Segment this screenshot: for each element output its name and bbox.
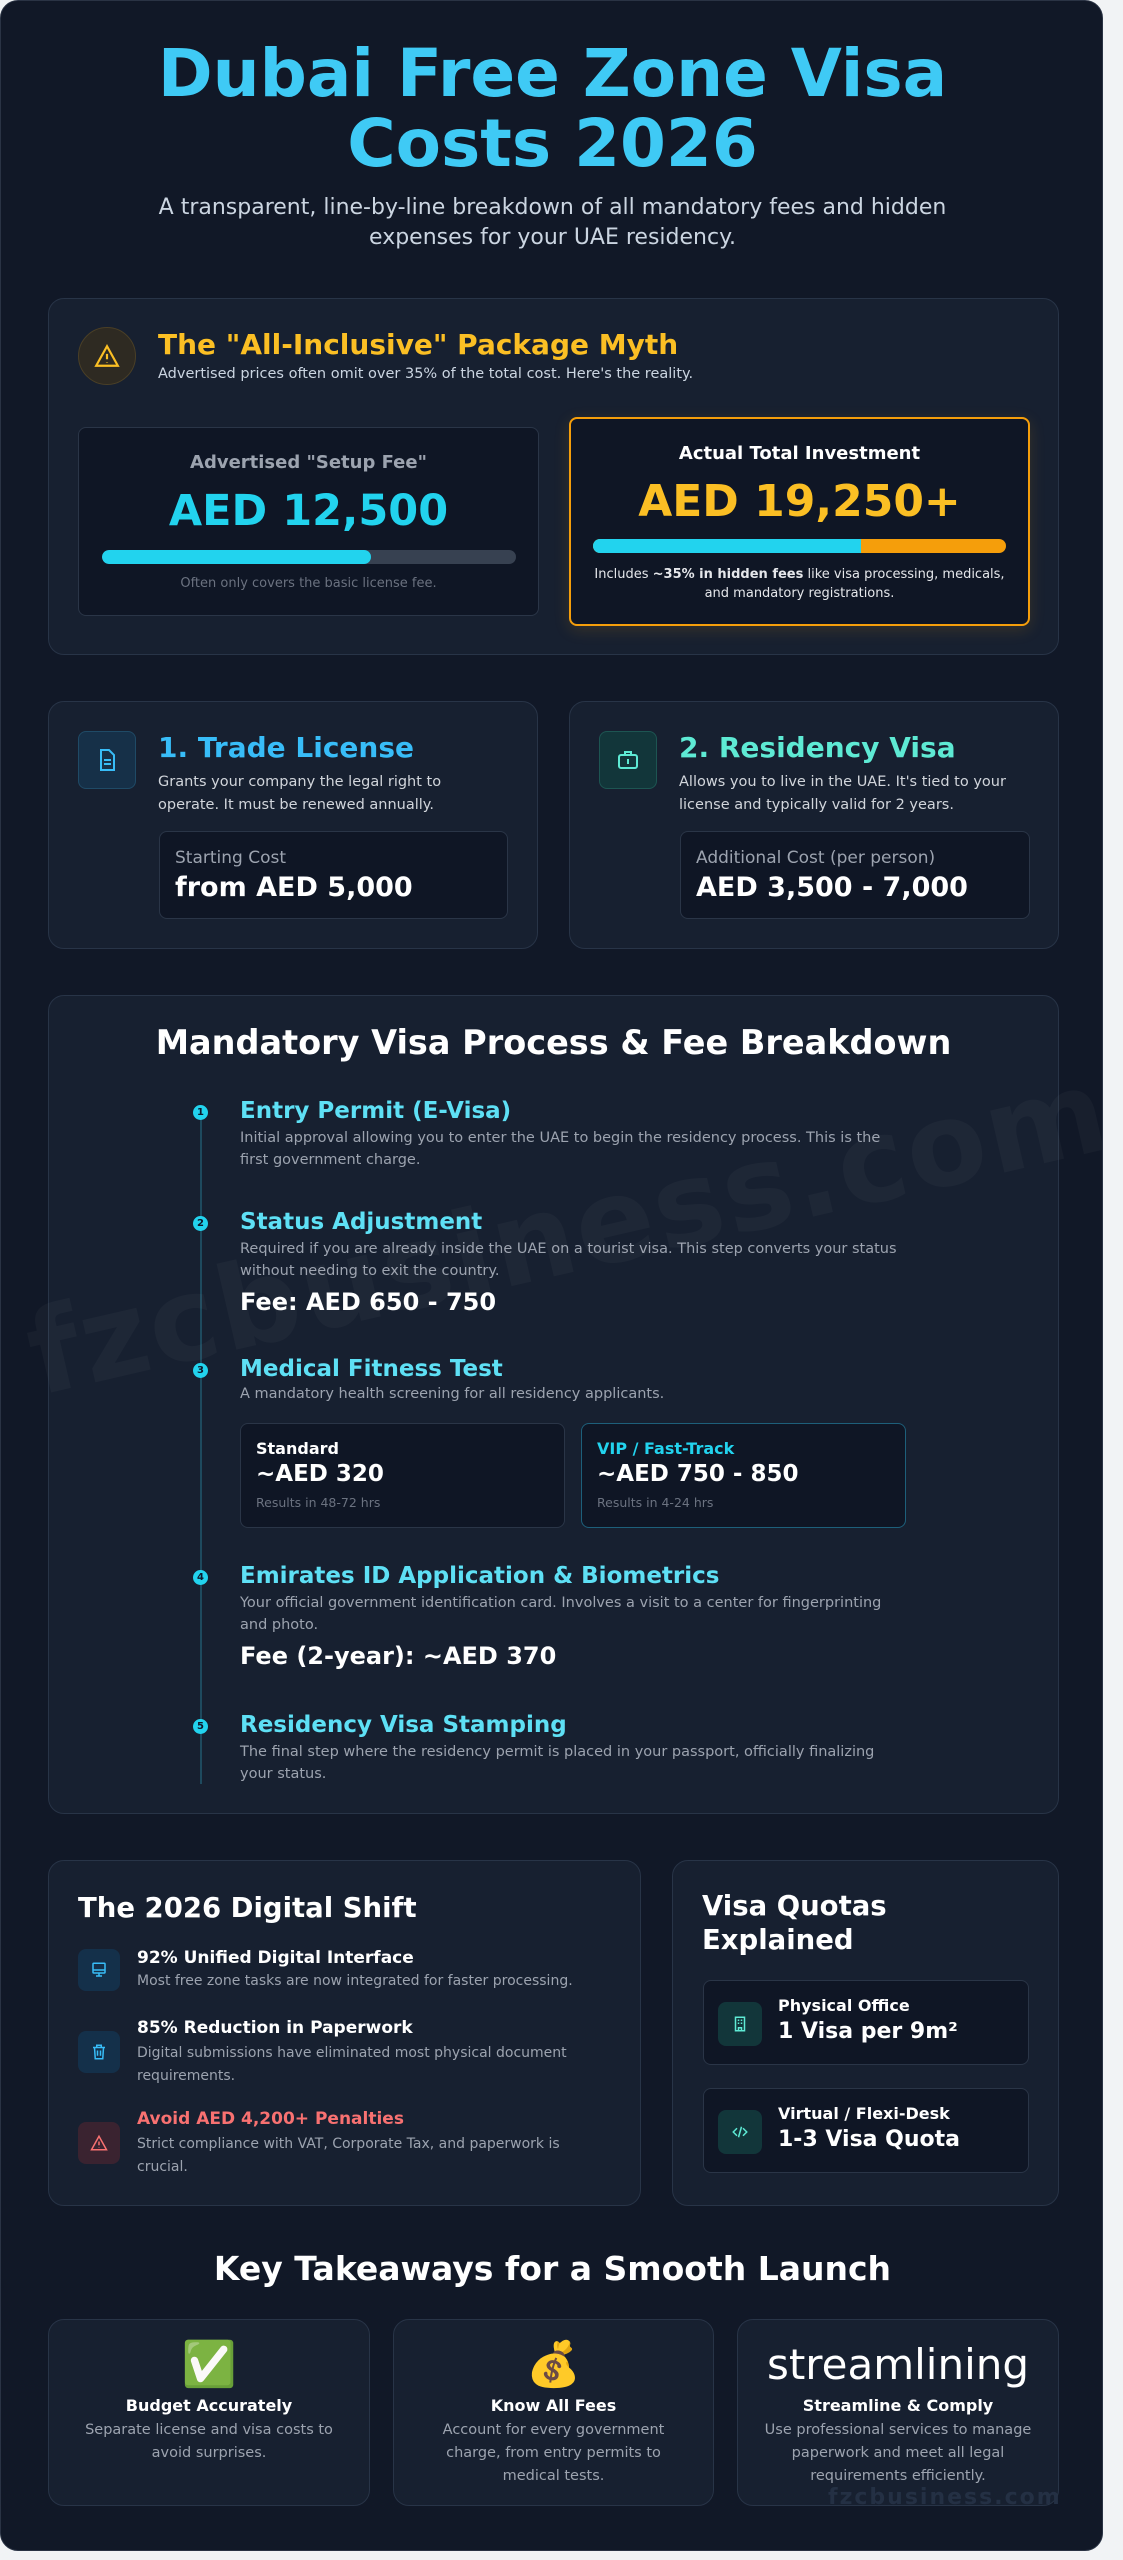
cost box	[159, 831, 508, 919]
step 5: The final step where the residency permit is placed in your passport, officially finalizing	[240, 1744, 874, 1760]
box: standard: Results in 48-72 hrs	[256, 1495, 380, 1510]
step 2: Fee: AED 650 - 750	[240, 1288, 496, 1316]
box: virtual: 1-3 Visa Quota	[778, 2127, 960, 2152]
item: penalties: crucial.	[137, 2159, 188, 2175]
box: standard	[240, 1423, 565, 1528]
subtitle: expenses for your UAE residency.	[369, 225, 736, 250]
cost box: from AED 5,000	[175, 872, 413, 903]
step 1: 1	[197, 1107, 204, 1118]
step 4	[193, 1563, 881, 1670]
step 2: without needing to exit the country.	[240, 1263, 500, 1279]
watermark: fzcbusiness.com	[15, 1043, 1103, 1423]
heading: Mandatory Visa Process & Fee Breakdown	[156, 1023, 951, 1062]
step 1: first government charge.	[240, 1152, 420, 1168]
step 4: 4	[197, 1572, 204, 1583]
step 2: Status Adjustment	[240, 1209, 482, 1235]
panel: residency visa: license and typically valid for 2 years.	[679, 797, 954, 813]
timeline line	[200, 1110, 202, 1784]
item: paperwork: Digital submissions have eliminated most physical document	[137, 2045, 567, 2061]
icon: document	[78, 731, 136, 789]
heading: takeaways: Key Takeaways for a Smooth Launch	[214, 2249, 891, 2288]
card: fees: 💰	[526, 2338, 581, 2390]
card: streamline: paperwork and meet all legal	[792, 2445, 1004, 2461]
box: virtual: Virtual / Flexi-Desk	[778, 2104, 950, 2123]
panel: digital shift	[48, 1860, 641, 2206]
box: advertised: AED 12,500	[169, 486, 448, 536]
cost box	[680, 831, 1030, 919]
panel: trade license: operate. It must be renewed annually.	[158, 797, 434, 813]
card: fees: Account for every government	[443, 2422, 664, 2438]
footer watermark: fzcbusiness.com	[828, 2485, 1062, 2510]
item: paperwork: 85% Reduction in Paperwork	[137, 2018, 413, 2038]
step 5: your status.	[240, 1766, 326, 1782]
card: streamline: Streamline & Comply	[803, 2396, 993, 2415]
card: streamline: streamlining	[767, 2340, 1029, 2389]
box: actual	[569, 417, 1030, 626]
box: advertised: Advertised "Setup Fee"	[190, 452, 427, 473]
card: fees: medical tests.	[503, 2468, 604, 2484]
card: budget: ✅	[182, 2338, 236, 2390]
bar	[593, 539, 1006, 553]
step 5: 5	[197, 1721, 204, 1732]
step 2: Required if you are already inside the UAE on a tourist visa. This step converts your status	[240, 1241, 897, 1257]
step 1	[193, 1098, 880, 1168]
card: budget: avoid surprises.	[152, 2445, 266, 2461]
card: budget: Budget Accurately	[126, 2396, 292, 2415]
title	[158, 35, 947, 182]
item: penalties: Avoid AED 4,200+ Penalties	[137, 2109, 404, 2129]
box: actual: and mandatory registrations.	[705, 586, 894, 601]
panel: residency visa	[569, 701, 1059, 949]
box: actual: AED 19,250+	[638, 476, 961, 527]
panel: residency visa: Allows you to live in the UAE. It's tied to your	[679, 774, 1006, 790]
icon: passport	[599, 731, 657, 789]
step 4: Fee (2-year): ~AED 370	[240, 1642, 556, 1670]
title: Costs 2026	[347, 105, 758, 182]
item: unified	[78, 1948, 573, 1991]
step 5	[193, 1712, 874, 1782]
step 2	[193, 1209, 897, 1316]
step 4: Emirates ID Application & Biometrics	[240, 1563, 719, 1589]
step 4: and photo.	[240, 1617, 318, 1633]
box: virtual	[703, 2088, 1029, 2173]
cost box: Starting Cost	[175, 848, 286, 868]
step 1: Initial approval allowing you to enter the UAE to begin the residency process. This is the	[240, 1130, 880, 1146]
subtitle: A transparent, line-by-line breakdown of all mandatory fees and hidden	[159, 195, 946, 220]
step 5: Residency Visa Stamping	[240, 1712, 567, 1738]
heading: The "All-Inclusive" Package Myth	[158, 328, 678, 361]
step 4: Your official government identification card. Involves a visit to a center for fingerprinting	[240, 1595, 881, 1611]
box: actual: Actual Total Investment	[679, 443, 920, 464]
panel: trade license: Grants your company the legal right to	[158, 774, 441, 790]
card: fees: charge, from entry permits to	[446, 2445, 661, 2461]
item: penalties: Strict compliance with VAT, Corporate Tax, and paperwork is	[137, 2136, 560, 2152]
box: physical office: Physical Office	[778, 1996, 910, 2015]
panel: quotas: Visa Quotas	[702, 1890, 887, 1922]
card: fees	[393, 2319, 714, 2506]
box: vip: VIP / Fast-Track	[597, 1439, 734, 1458]
card: fees: Know All Fees	[491, 2396, 616, 2415]
step 3: 3	[197, 1365, 204, 1376]
item: paperwork: requirements.	[137, 2068, 235, 2084]
box: advertised: Often only covers the basic license fee.	[180, 576, 437, 591]
card: streamline: Use professional services to manage	[765, 2422, 1031, 2438]
panel: quotas: Explained	[702, 1924, 854, 1956]
subtitle	[158, 195, 946, 250]
panel: trade license: 1. Trade License	[158, 731, 414, 764]
card: streamline: requirements efficiently.	[810, 2468, 986, 2484]
box: physical office: 1 Visa per 9m²	[778, 2019, 958, 2044]
step 3	[193, 1356, 906, 1528]
panel: digital shift: The 2026 Digital Shift	[78, 1892, 417, 1924]
box: vip: ~AED 750 - 850	[597, 1461, 798, 1487]
box: actual: Includes ~35% in hidden fees like visa processing, medicals,	[594, 567, 1005, 582]
step 3: A mandatory health screening for all residency applicants.	[240, 1386, 664, 1402]
panel: residency visa: 2. Residency Visa	[679, 731, 956, 764]
icon: warning	[78, 327, 136, 385]
panel: quotas	[672, 1860, 1059, 2206]
cost box: AED 3,500 - 7,000	[696, 872, 968, 903]
step 1: Entry Permit (E-Visa)	[240, 1098, 511, 1124]
panel: myth	[48, 298, 1059, 655]
box: standard: ~AED 320	[256, 1461, 384, 1487]
step 3: Medical Fitness Test	[240, 1356, 503, 1382]
item: penalties	[78, 2109, 560, 2175]
item: unified: 92% Unified Digital Interface	[137, 1948, 414, 1968]
cost box: Additional Cost (per person)	[696, 848, 935, 868]
subheading: Advertised prices often omit over 35% of the total cost. Here's the reality.	[158, 366, 693, 382]
panel: trade license	[48, 701, 538, 949]
box: advertised	[78, 427, 539, 616]
box: vip: Results in 4-24 hrs	[597, 1495, 713, 1510]
bar	[102, 550, 516, 564]
title: Dubai Free Zone Visa	[158, 35, 947, 112]
card: streamline	[737, 2319, 1059, 2506]
step 2: 2	[197, 1218, 204, 1229]
item: paperwork	[78, 2018, 567, 2084]
box: physical office	[703, 1980, 1029, 2065]
card: budget	[48, 2319, 370, 2506]
box: vip	[581, 1423, 906, 1528]
box: standard: Standard	[256, 1439, 339, 1458]
panel: process	[48, 995, 1059, 1814]
item: unified: Most free zone tasks are now integrated for faster processing.	[137, 1973, 573, 1989]
card: budget: Separate license and visa costs to	[85, 2422, 333, 2438]
